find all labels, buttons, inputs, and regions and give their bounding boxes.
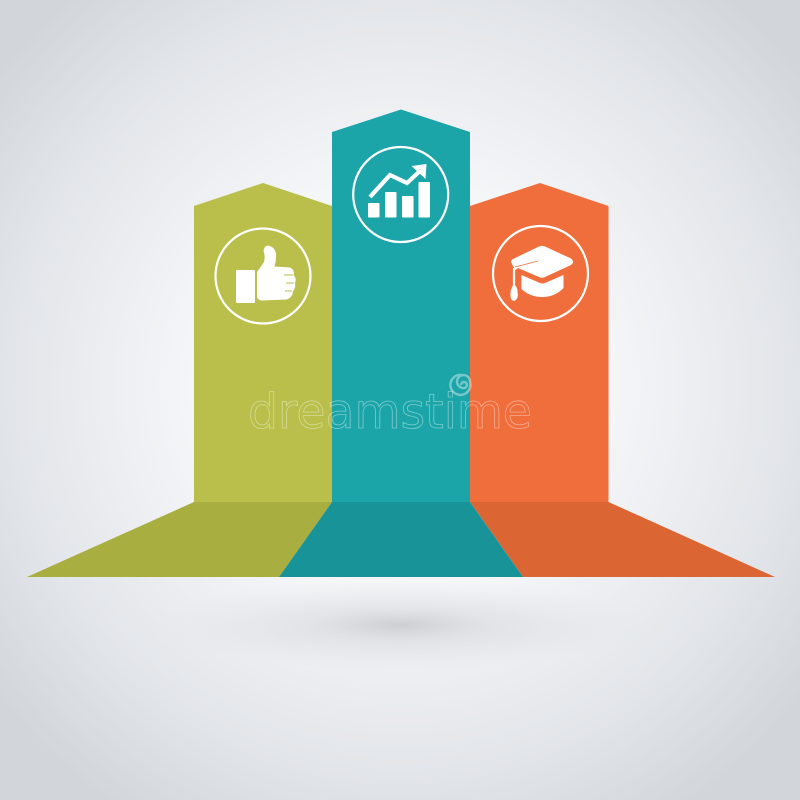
orange column body — [470, 183, 608, 502]
icon: thumbs up — [216, 228, 310, 324]
panel: left olive column — [27, 183, 332, 577]
floor shadow — [160, 579, 640, 671]
teal column body — [332, 110, 470, 502]
watermark spiral — [450, 375, 470, 395]
orange floor — [470, 502, 775, 577]
panel: centre teal column — [279, 110, 523, 577]
icon: growth chart — [353, 147, 448, 242]
watermark wordmark: dreamstime — [248, 384, 532, 440]
olive floor — [27, 502, 332, 577]
panel: right orange column — [470, 183, 775, 577]
icon: graduation cap — [493, 226, 588, 321]
olive column body — [194, 183, 332, 502]
watermark — [248, 375, 532, 440]
teal floor — [279, 502, 523, 577]
